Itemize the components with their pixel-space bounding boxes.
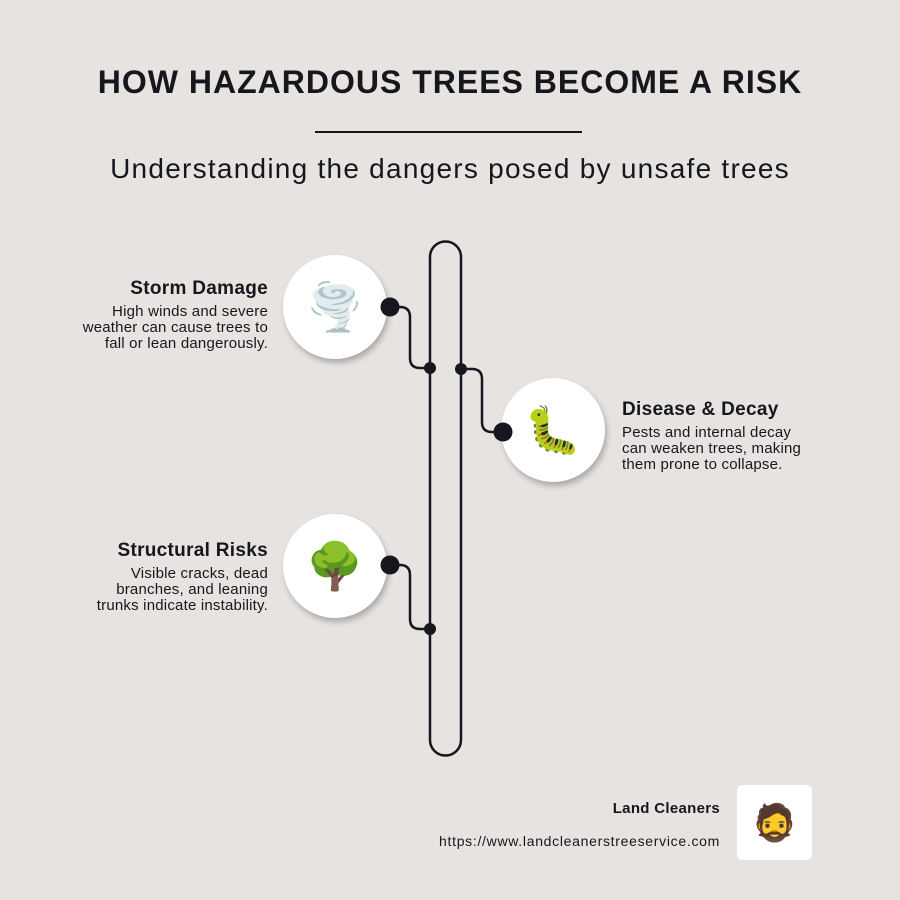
icon: tree xyxy=(283,514,387,618)
text: storm damage: High winds and severe xyxy=(112,303,268,320)
logo: 🧔 xyxy=(752,802,797,842)
panel: disease xyxy=(500,378,801,489)
text: structural: trunks indicate instability. xyxy=(97,597,268,614)
logo xyxy=(737,785,812,860)
title: HOW HAZARDOUS TREES BECOME A RISK xyxy=(98,64,802,100)
icon: caterpillar: 🐛 xyxy=(524,404,582,456)
footer brand: Land Cleaners xyxy=(613,800,720,817)
text: storm damage: weather can cause trees to xyxy=(83,319,268,336)
panel: storm damage xyxy=(82,255,392,366)
text: storm damage: Storm Damage xyxy=(130,278,268,299)
subtitle: Understanding the dangers posed by unsafe trees xyxy=(110,153,790,184)
text: disease: Disease & Decay xyxy=(622,399,779,420)
text: disease xyxy=(622,399,801,473)
text: disease: Pests and internal decay xyxy=(622,424,791,441)
panel: structural xyxy=(96,514,392,625)
text: disease: can weaken trees, making xyxy=(622,440,801,457)
icon: tree: 🌳 xyxy=(306,540,364,592)
icon: tornado xyxy=(283,255,387,359)
text: storm damage: fall or lean dangerously. xyxy=(105,335,268,352)
text: structural: Structural Risks xyxy=(117,540,268,561)
text: structural xyxy=(96,540,268,614)
text: storm damage xyxy=(82,278,268,352)
icon: caterpillar xyxy=(501,378,605,482)
text: https://www.landcleanerstreeservice.com xyxy=(439,833,720,849)
text: structural: branches, and leaning xyxy=(116,581,268,598)
icon: tornado: 🌪️ xyxy=(306,280,364,332)
text: structural: Visible cracks, dead xyxy=(131,565,268,582)
text: disease: them prone to collapse. xyxy=(622,456,783,473)
